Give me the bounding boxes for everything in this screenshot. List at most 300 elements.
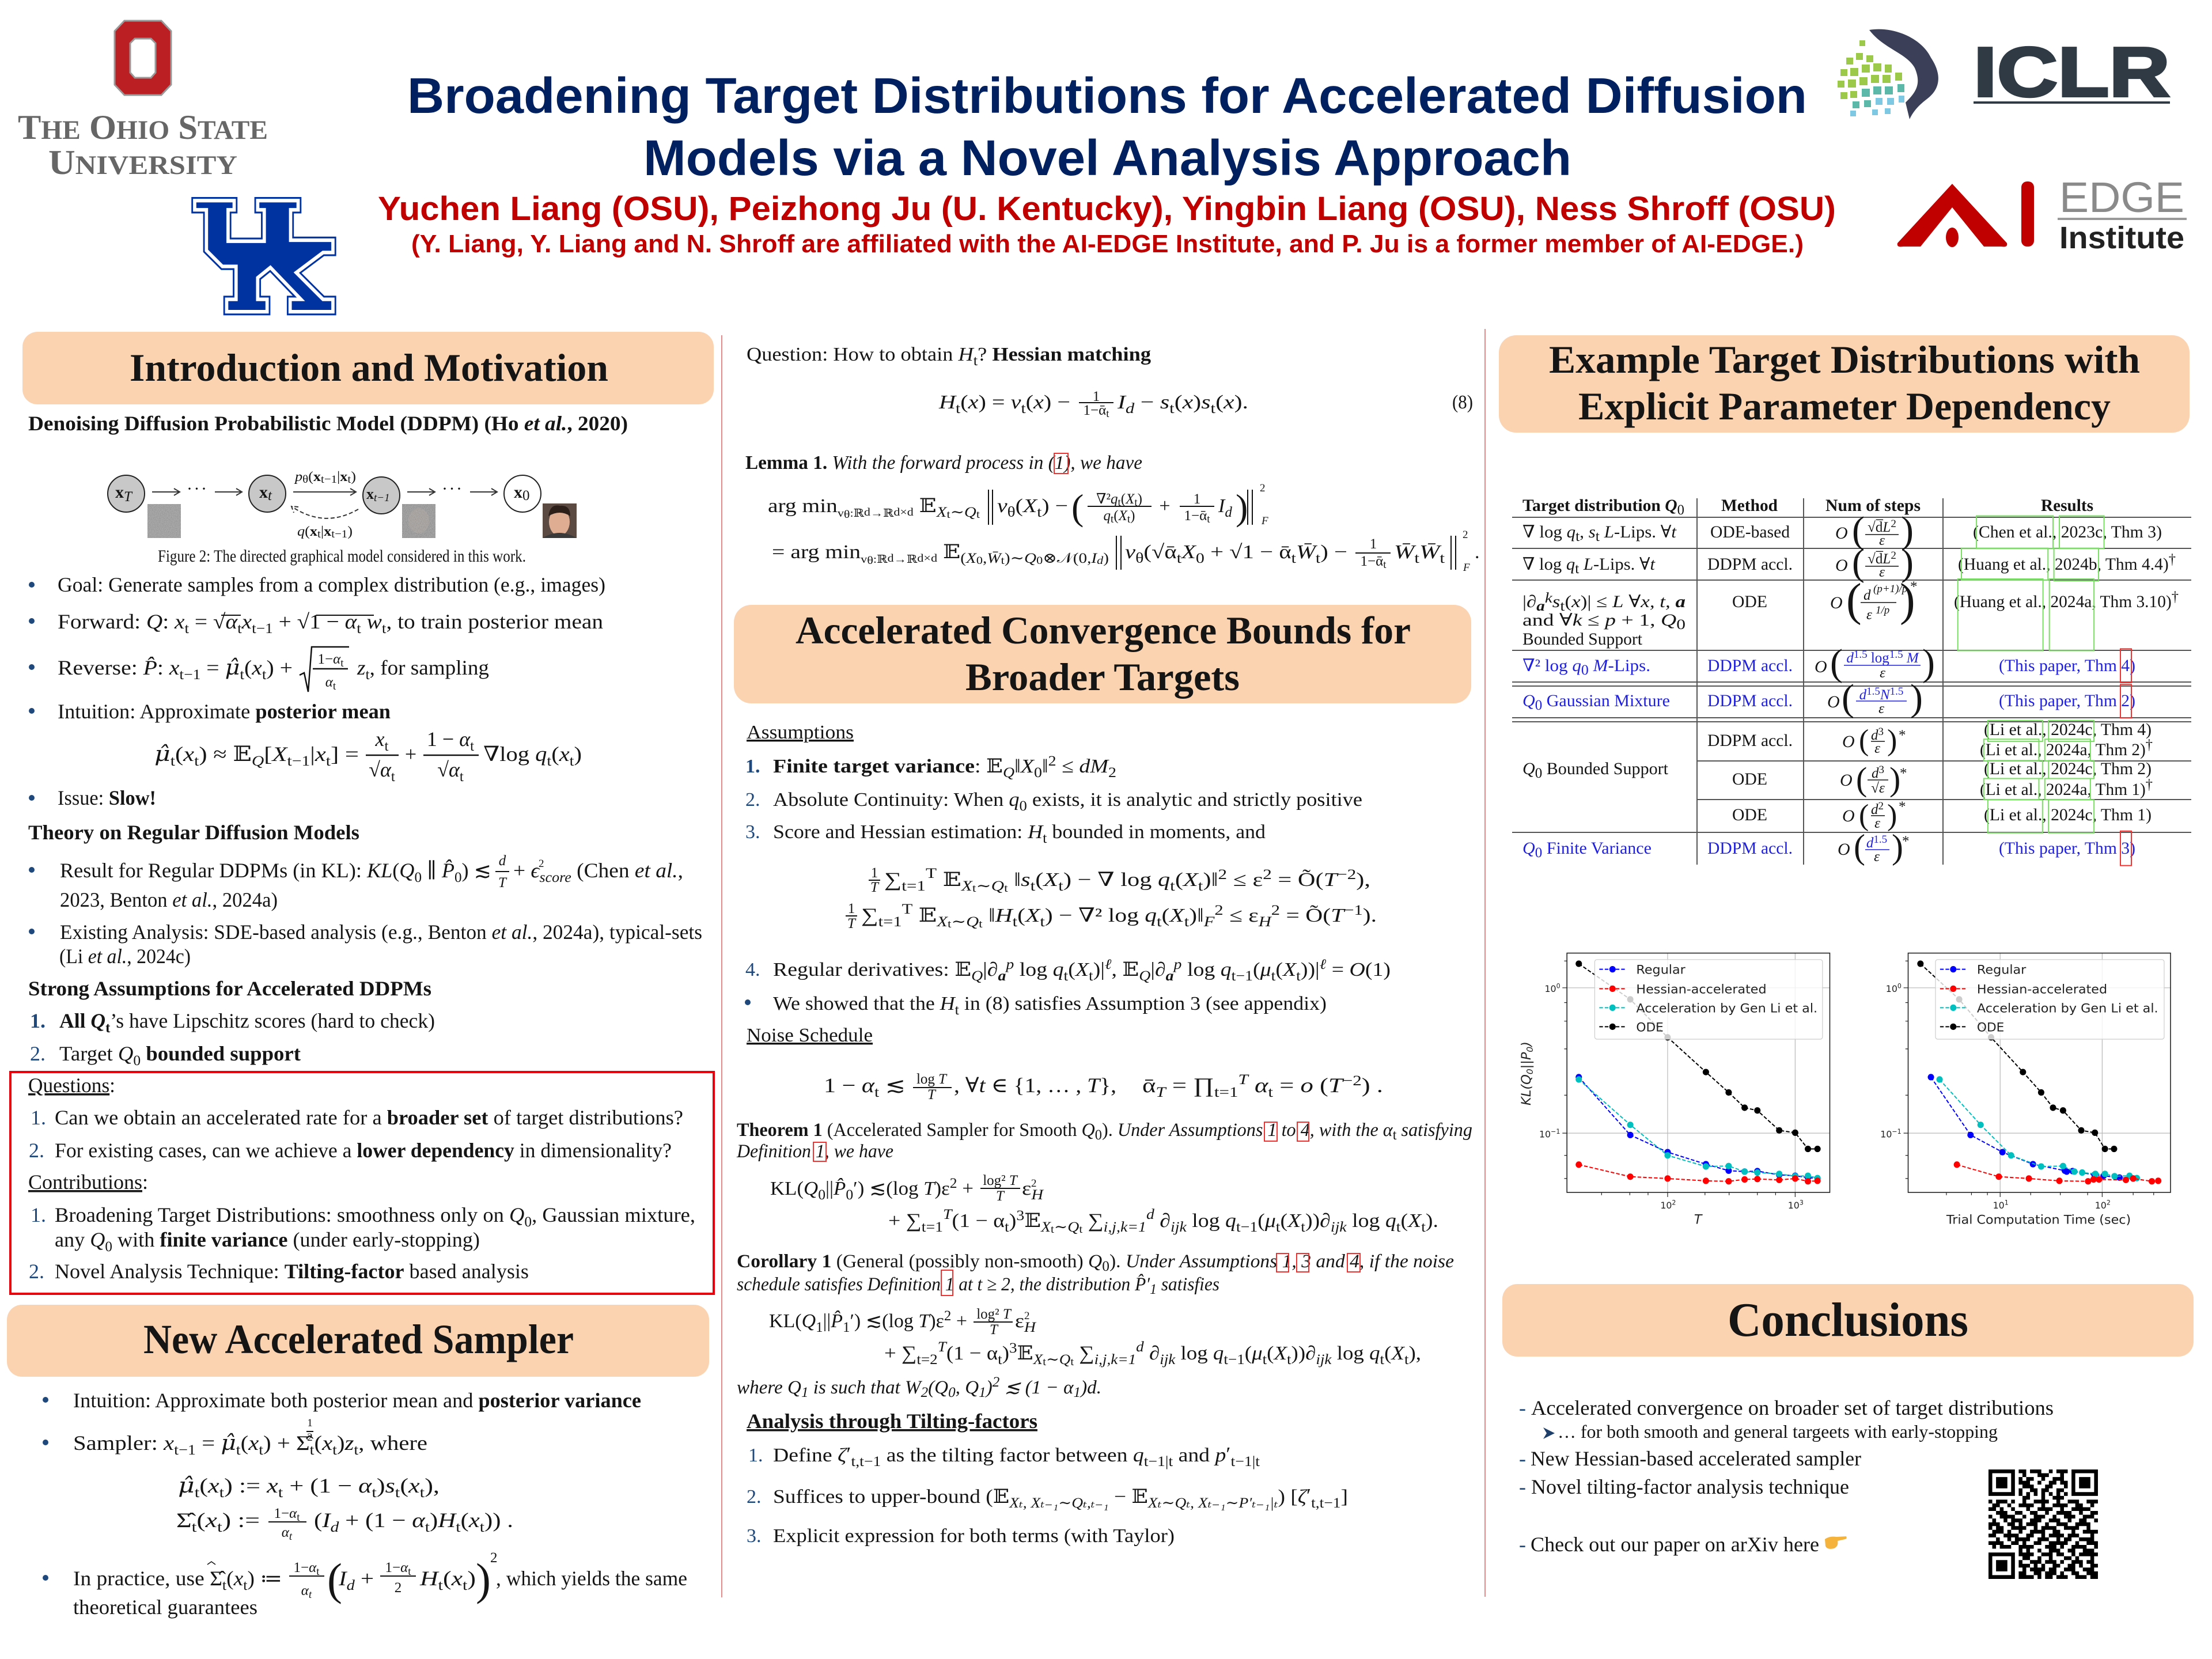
equation: score bound: ) − ∇ log	[1063, 869, 1158, 891]
equation: mean estimator: (	[199, 1474, 208, 1497]
corollary 1: Under Assumptions 1, 3 and 4, if the noise	[1126, 1251, 1454, 1272]
bullet: forward: t	[184, 621, 189, 637]
equation: corollary bound: ε	[1015, 1310, 1023, 1332]
table: method column: DDPM accl.	[1707, 731, 1793, 750]
theorem 1: satisfying	[1396, 1120, 1472, 1141]
equation: noise schedule: T	[927, 1087, 937, 1103]
bullet: forward: w	[361, 610, 382, 633]
table: number of steps column: )	[1887, 799, 1897, 832]
equation: theorem bound: log	[1187, 1210, 1225, 1232]
list: assumptions: 2.	[30, 1042, 46, 1065]
equation: posterior mean: √α	[369, 758, 391, 781]
bullet: result for regular DDPMs: + ϵ	[513, 859, 539, 882]
bullet: sampler: t	[259, 1442, 263, 1458]
equation: arg min 1: t	[1118, 497, 1121, 509]
equation: theorem bound: t	[1276, 1219, 1281, 1235]
equation: mean estimator: x	[207, 1474, 219, 1497]
diagram: directed graphical model	[108, 469, 577, 540]
bullet: sampler: ) + Σ̂	[263, 1431, 313, 1455]
heading: Conclusions	[1728, 1293, 1968, 1347]
equation: theorem bound: (	[1281, 1210, 1287, 1232]
bullet: intuition: Intuition: Approximate posterior mean	[58, 700, 391, 723]
note on H_t	[745, 993, 1327, 1018]
questions: 2.	[29, 1139, 44, 1162]
table: number of steps column: √d̅L	[1868, 551, 1891, 567]
assumption 4: O(1)	[1350, 959, 1388, 980]
equation: corollary bound: ))∂	[1291, 1343, 1316, 1364]
bullet: result for regular DDPMs: d	[499, 853, 506, 869]
equation: theorem bound: log² T	[983, 1173, 1018, 1188]
bullet: in practice: t	[309, 1589, 312, 1601]
equation: theorem bound: t	[1079, 1224, 1083, 1236]
axis tick labels: 0	[1897, 983, 1902, 990]
table: results column: (This paper, Thm 2)	[1999, 691, 2135, 710]
equation: arg min 2: ,	[983, 551, 987, 566]
equation: corollary bound: t=2	[916, 1352, 938, 1368]
equation 8: v	[1011, 392, 1022, 413]
table: number of steps column	[1815, 509, 1935, 866]
bullet: in practice: t	[243, 1578, 248, 1593]
bullet: forward: t	[357, 621, 361, 637]
diagram: directed graphical model: 0	[522, 488, 530, 503]
equation: corollary bound: ∑	[1074, 1343, 1094, 1364]
equation: hessian bound: T	[1331, 905, 1346, 926]
equation: variance estimator: x	[204, 1509, 217, 1532]
equation: variance estimator: t	[217, 1520, 222, 1535]
assumption 1: ≤	[1056, 756, 1079, 777]
conclusion: arXiv link: Check out our paper on arXiv here	[1531, 1533, 1819, 1556]
bullet: forward: + √1 −	[273, 610, 345, 633]
bullet: reverse: Reverse: P̂: x	[58, 656, 179, 679]
assumption 4: μ	[1260, 959, 1271, 980]
question: ?	[978, 344, 992, 365]
equation: hessian bound: T	[847, 916, 857, 931]
assumption 4: t	[1296, 968, 1301, 984]
equation: theorem bound: )	[1009, 1210, 1016, 1232]
text: ICLR: ICLR	[1974, 33, 2170, 111]
contributions: with	[112, 1228, 160, 1251]
equation: noise schedule: = ∏	[1166, 1074, 1214, 1097]
equation: corollary bound: 2	[944, 1308, 951, 1324]
table header: Method	[1721, 496, 1778, 515]
bullet: sampler: Sampler: x	[73, 1431, 173, 1455]
axis tick labels: 1	[2005, 1199, 2009, 1207]
equation: hessian bound: t	[1184, 914, 1189, 930]
text: EDGE: EDGE	[2059, 173, 2184, 221]
equation: arg min 1: ∼	[950, 505, 964, 520]
equation: arg min 1: d×d	[893, 506, 914, 518]
equation: noise schedule: o (T	[1301, 1074, 1340, 1097]
tilting step 2	[747, 1485, 1348, 1511]
assumption 3: t	[1043, 831, 1047, 846]
diagram: directed graphical model: x	[366, 486, 374, 502]
equation: posterior mean	[154, 728, 582, 785]
equation: mean estimator: μ̂	[178, 1474, 195, 1498]
equation: score bound: −2	[1337, 867, 1356, 882]
contributions: 2.	[29, 1260, 44, 1283]
equation: hessian bound: 𝔼	[912, 905, 937, 926]
table: number of steps column: 2	[1878, 800, 1884, 812]
series: Regular	[1575, 1074, 1821, 1182]
table: number of steps column: )	[1901, 509, 1914, 551]
assumption 4	[745, 957, 1391, 984]
diagram: directed graphical model: ···	[187, 479, 207, 498]
bullet: in practice: d	[347, 1578, 355, 1593]
equation: corollary bound: P̂	[830, 1310, 843, 1332]
table: number of steps column: *	[1900, 766, 1907, 781]
equation: posterior mean: 1 − α	[427, 728, 470, 751]
equation: corollary bound: (	[1245, 1343, 1252, 1364]
equation 8: (8)	[1452, 392, 1473, 413]
equation: arg min 1: X	[1125, 491, 1135, 507]
equation: mean estimator: t	[395, 1485, 400, 1501]
equation: corollary bound: ∼	[1046, 1352, 1059, 1368]
series: Acceleration by Gen Li et al.	[1575, 1076, 1821, 1181]
equation: corollary bound: (1 − α	[946, 1343, 998, 1364]
assumption 2: 2.	[745, 789, 760, 810]
equation: arg min 2: (	[960, 551, 966, 566]
equation: arg min 1: X	[936, 505, 948, 520]
table: number of steps column: 3	[1878, 726, 1884, 738]
equation: hessian bound: Q	[966, 914, 979, 930]
equation: corollary bound: t	[1263, 1352, 1267, 1368]
equation: arg min 2: 0	[976, 555, 983, 567]
bullet: in practice: )	[467, 1567, 476, 1590]
table header: Target distribution Q	[1522, 496, 1677, 515]
equation: mean estimator: t	[420, 1485, 425, 1501]
assumption 1: 2	[1048, 753, 1056, 769]
QR code	[1988, 1469, 2098, 1579]
text: University: UNIVERSITY	[48, 143, 237, 181]
table: target distribution column: t	[1575, 529, 1580, 544]
equation: score bound: t	[1170, 878, 1175, 894]
assumption 1: Finite target variance : 𝔼	[773, 756, 1000, 777]
series: Acceleration by Gen Li et al.	[1937, 1076, 2140, 1181]
questions: Can we obtain an accelerated rate for a broader set of target distributions?	[55, 1106, 683, 1129]
equation: corollary bound: X	[1033, 1352, 1044, 1368]
series: Regular	[1928, 1074, 2137, 1182]
table: number of steps column: d	[1859, 687, 1867, 703]
bullet: reverse: t	[333, 680, 336, 692]
assumption 3: Score and Hessian estimation: H	[773, 821, 1042, 843]
equation: theorem bound: ∼	[1054, 1219, 1067, 1235]
equation: score bound: t	[1031, 878, 1035, 894]
table: number of steps column: 1.5	[1873, 834, 1887, 846]
table: number of steps column: ε	[1878, 701, 1884, 717]
contributions: Broadening Target Distributions: smoothness only on Q	[55, 1203, 524, 1226]
table: number of steps column: O	[1835, 556, 1848, 575]
bullet: result for regular DDPMs: 0	[454, 870, 462, 885]
equation: score bound: (	[1175, 869, 1183, 891]
equation: arg min 2: 1	[1370, 536, 1377, 552]
equation: posterior mean: μ̂	[154, 743, 171, 766]
table: target distribution column: ∇ log q	[1522, 522, 1575, 541]
equation: hessian bound: t	[979, 918, 983, 930]
equation: variance estimator: H	[437, 1509, 457, 1532]
equation: arg min 1: t	[1111, 513, 1114, 525]
table: target distribution column: t	[1560, 599, 1565, 614]
equation: theorem bound: X	[1286, 1210, 1302, 1232]
contributions: , Gaussian mixture,	[532, 1203, 695, 1226]
where clause: ≲ (1 − α	[999, 1377, 1074, 1398]
table: number of steps column: *	[1910, 579, 1917, 594]
equation: variance estimator: 1−α	[274, 1506, 297, 1521]
bullet: in practice: I	[338, 1567, 348, 1590]
assumption 4: t	[1089, 968, 1093, 984]
chart: KL vs T	[1519, 953, 1830, 1228]
equation: arg min 1: t	[1127, 513, 1131, 525]
equation 8: t	[1169, 401, 1175, 416]
assumption 4: t	[1064, 968, 1068, 984]
assumption 4: , 𝔼	[1112, 959, 1139, 980]
table header	[1522, 496, 2093, 518]
where clause: 1	[1074, 1385, 1081, 1400]
corollary 1: 0	[1102, 1259, 1109, 1274]
list: assumptions: ’s have Lipschitz scores (hard to check)	[110, 1009, 435, 1032]
table: number of steps column: (	[1859, 724, 1869, 757]
list: assumptions: t	[105, 1020, 111, 1036]
questions: For existing cases, can we achieve a lower dependency in dimensionality?	[55, 1139, 672, 1162]
equation: arg min 2: ⊗𝒩(0,	[1043, 551, 1091, 566]
where clause: 1	[801, 1385, 809, 1400]
equation: arg min 1: (	[1071, 487, 1084, 528]
equation: hessian bound: H	[994, 905, 1014, 926]
table: number of steps column: ε	[1880, 665, 1885, 681]
equation: corollary bound: )	[1002, 1343, 1009, 1364]
equation: posterior mean: +	[405, 743, 416, 766]
sub-heading: theory: Theory on Regular Diffusion Models	[28, 821, 359, 844]
legend: ODE	[1977, 1020, 2004, 1035]
equation: variance estimator: + (1 −	[339, 1509, 412, 1532]
bullet: result for regular DDPMs	[29, 853, 683, 911]
axis tick labels: 10	[1539, 1128, 1551, 1139]
assumption 4: p	[1172, 957, 1181, 972]
equation: theorem bound: d	[1146, 1207, 1154, 1222]
equation 8: (	[1175, 392, 1183, 413]
bullet: reverse: z	[357, 656, 365, 679]
table: method column: DDPM accl.	[1707, 555, 1793, 574]
assumptions heading: Assumptions	[747, 722, 854, 743]
table: number of steps column: *	[1899, 799, 1906, 815]
table: target distribution column: a	[1536, 599, 1545, 614]
equation: corollary bound: t−1	[1224, 1352, 1245, 1368]
assumption 4: Q	[1139, 968, 1150, 984]
equation: mean estimator: x	[266, 1474, 278, 1497]
series: ODE	[1575, 960, 1821, 1152]
table: number of steps column: )	[1900, 575, 1915, 626]
assumption 1: 2	[1108, 765, 1116, 781]
assumption 2	[745, 789, 1362, 814]
bullet: in practice: t	[438, 1578, 443, 1593]
bullet: in practice: , which yields the same	[496, 1567, 687, 1590]
bullet: in practice: In practice, use Σ̂	[73, 1567, 217, 1590]
bullet: sampler: t−1	[174, 1442, 196, 1458]
equation: score bound: ≤ ε	[1227, 869, 1263, 891]
equation: arg min 2: )∼	[1005, 551, 1024, 566]
equation: corollary bound: ijk	[1160, 1352, 1176, 1368]
table: number of steps column: O	[1827, 692, 1840, 711]
table: number of steps column: ε	[1879, 533, 1885, 548]
assumption 4: ℓ	[1105, 957, 1112, 972]
equation: corollary bound: ′) ≲(log	[850, 1310, 918, 1332]
equation: mean estimator: s	[385, 1474, 395, 1497]
tilting step 1: q	[1133, 1445, 1144, 1466]
equation: arg min 2: d×d	[917, 552, 938, 565]
equation: corollary bound: t	[1287, 1352, 1291, 1368]
equation 8: t	[1106, 408, 1109, 420]
equation: theorem bound: T)ε	[923, 1178, 949, 1199]
diagram: directed graphical model: q(x	[297, 524, 317, 539]
equation: theorem bound: 0	[818, 1187, 825, 1203]
equation: arg min 1: Q	[964, 505, 976, 520]
legend: Hessian-accelerated	[1977, 982, 2107, 997]
equation: variance estimator: α	[282, 1525, 289, 1540]
where clause: 2	[993, 1374, 999, 1390]
diagram: directed graphical model: θ	[302, 474, 308, 486]
note on H_t: t	[955, 1002, 959, 1018]
logo: ICLR	[1838, 29, 2170, 119]
equation: corollary bound: ijk	[1316, 1352, 1332, 1368]
equation: noise schedule: ᾱ	[1142, 1074, 1153, 1097]
bullet: forward: t	[382, 621, 387, 637]
tilting step 3: Explicit expression for both terms (with Taylor)	[773, 1525, 1175, 1547]
equation: score bound: (	[1035, 869, 1043, 891]
equation: theorem bound: t	[1005, 1219, 1009, 1235]
assumption 1: dM	[1079, 756, 1109, 777]
bullet: forward: α	[345, 610, 357, 633]
bullet: sampler: )	[337, 1431, 345, 1455]
equation: mean estimator: ),	[425, 1474, 440, 1497]
tilting step 2: Suffices to upper-bound (𝔼	[773, 1486, 988, 1508]
bullet: in practice: 2	[395, 1580, 402, 1596]
panel: accelerated convergence bounds	[734, 605, 1472, 1547]
equation: arg min 2: W̄	[987, 551, 1002, 566]
table: number of steps column: 3	[1879, 764, 1884, 776]
equation: hessian bound: = Õ(	[1280, 905, 1331, 926]
equation: posterior mean: ] =	[331, 743, 359, 766]
bullet: intuition: Intuition: Approximate both posterior mean and posterior variance	[73, 1389, 641, 1412]
equation: hessian bound: F	[1203, 914, 1215, 930]
bullet: issue: Issue: Slow!	[58, 786, 156, 809]
equation: hessian bound: H	[1258, 914, 1272, 930]
equation: hessian bound: ‖	[983, 905, 995, 926]
equation: noise schedule: , ∀t ∈ {1, … , T},	[954, 1074, 1116, 1097]
equation: theorem bound: q	[1385, 1210, 1396, 1232]
equation: arg min 2: v	[861, 554, 868, 566]
equation: arg min 1: 1−ᾱ	[1184, 508, 1207, 524]
equation: hessian bound: X	[1024, 905, 1041, 926]
table: number of steps column: O	[1835, 524, 1848, 543]
assumption 1: 0	[1034, 765, 1042, 781]
equation: mean estimator: t	[195, 1485, 199, 1501]
assumption 4: 4.	[745, 959, 760, 980]
equation: corollary bound: X	[1272, 1343, 1287, 1364]
where clause: 1	[979, 1385, 986, 1400]
equation: hessian bound: 1	[848, 901, 855, 916]
equation: arg min 1: q	[1104, 508, 1111, 524]
tilting step 1	[748, 1444, 1260, 1469]
assumption 4: |∂	[1150, 959, 1166, 980]
equation: score bound: q	[1158, 869, 1170, 891]
equation: corollary bound: T	[990, 1322, 999, 1338]
bullet: in practice: (	[226, 1567, 234, 1590]
equation: variance estimator: α	[412, 1509, 426, 1532]
table: target distribution column: 0	[1535, 698, 1542, 713]
equation: variance estimator: (	[460, 1509, 469, 1532]
axis tick labels: 10	[1886, 983, 1897, 994]
equation: arg min 1: d	[864, 506, 871, 518]
equation: posterior mean: ∇log q	[483, 743, 546, 766]
equation: score bound: ),	[1356, 869, 1370, 891]
equation: posterior mean: (	[551, 743, 559, 766]
table: target distribution column: 0	[1535, 766, 1542, 781]
bullet: result for regular DDPMs: Result for Regular DDPMs (in KL): KL(Q	[60, 859, 414, 882]
equation: hessian bound: t	[1040, 914, 1045, 930]
table: target distribution column: Gaussian Mixture	[1542, 691, 1670, 710]
assumption 4: log	[1014, 959, 1053, 980]
table: number of steps column: )	[1892, 828, 1903, 866]
equation: arg min 1: →ℝ	[870, 507, 894, 520]
bullet: sampler: (	[241, 1431, 248, 1455]
equation: theorem bound: Q	[1067, 1219, 1079, 1235]
equation: theorem bound: 𝔼	[1024, 1210, 1041, 1232]
equation: posterior mean: x	[375, 728, 385, 751]
bullet: reverse: μ̂	[225, 656, 240, 680]
equation: theorem bound: q	[1225, 1210, 1236, 1232]
assumption 4: log	[1181, 959, 1221, 980]
assumption 1: ‖	[1014, 756, 1021, 777]
series: Hessian-accelerated	[1575, 1161, 1821, 1184]
tilting step 2: Xₜ∼Qₜ, Xₜ₋₁∼P′ₜ₋₁|ₜ	[1147, 1495, 1278, 1511]
equation: score bound: T	[926, 866, 937, 881]
equation: noise schedule: −2	[1343, 1073, 1362, 1089]
equation: variance estimator: x	[468, 1509, 480, 1532]
diagram: directed graphical model: (	[308, 469, 313, 484]
assumption 4: (	[1275, 959, 1283, 980]
corollary 1: 1	[1150, 1282, 1157, 1297]
equation: arg min 1: F	[1261, 515, 1268, 527]
diagram: directed graphical model: x	[115, 483, 124, 502]
equation: arg min 1: θ	[844, 509, 850, 521]
table: number of steps column: *	[1902, 834, 1909, 849]
equation: corollary bound: 1	[816, 1320, 823, 1335]
equation: theorem bound	[770, 1173, 1438, 1236]
table: results column: (Li et al., 2024a, Thm 2)	[1980, 740, 2149, 759]
table: target distribution column: L-Lips. ∀t	[1604, 522, 1676, 541]
equation 8	[938, 389, 1473, 420]
equation: noise schedule: t	[874, 1085, 879, 1100]
theorem 1: Definition 1, we have	[736, 1141, 893, 1162]
table: target distribution column: 0	[1581, 662, 1589, 678]
equation: hessian bound: t	[1013, 914, 1017, 930]
equation: variance estimator: t	[192, 1520, 197, 1535]
where clause: where Q	[737, 1377, 801, 1398]
equation: noise schedule: =	[1273, 1074, 1301, 1097]
table: number of steps column: ε	[1879, 565, 1885, 580]
tilting step 1: t−1|t	[1144, 1454, 1173, 1469]
equation: hessian bound: ≤ ε	[1224, 905, 1259, 926]
equation 8: I	[1117, 392, 1127, 413]
equation 8: (	[1215, 392, 1224, 413]
conclusion: arXiv link: -	[1519, 1533, 1526, 1556]
table: number of steps column: (	[1846, 575, 1862, 626]
assumption 4: (	[1068, 959, 1075, 980]
questions: Questions:	[28, 1074, 115, 1097]
equation: arg min 2: ) −	[1320, 541, 1347, 563]
equation: arg min 1: t	[1037, 505, 1041, 520]
equation: arg min 2: Q	[1024, 551, 1036, 566]
equation: arg min 2: t	[1177, 551, 1181, 566]
